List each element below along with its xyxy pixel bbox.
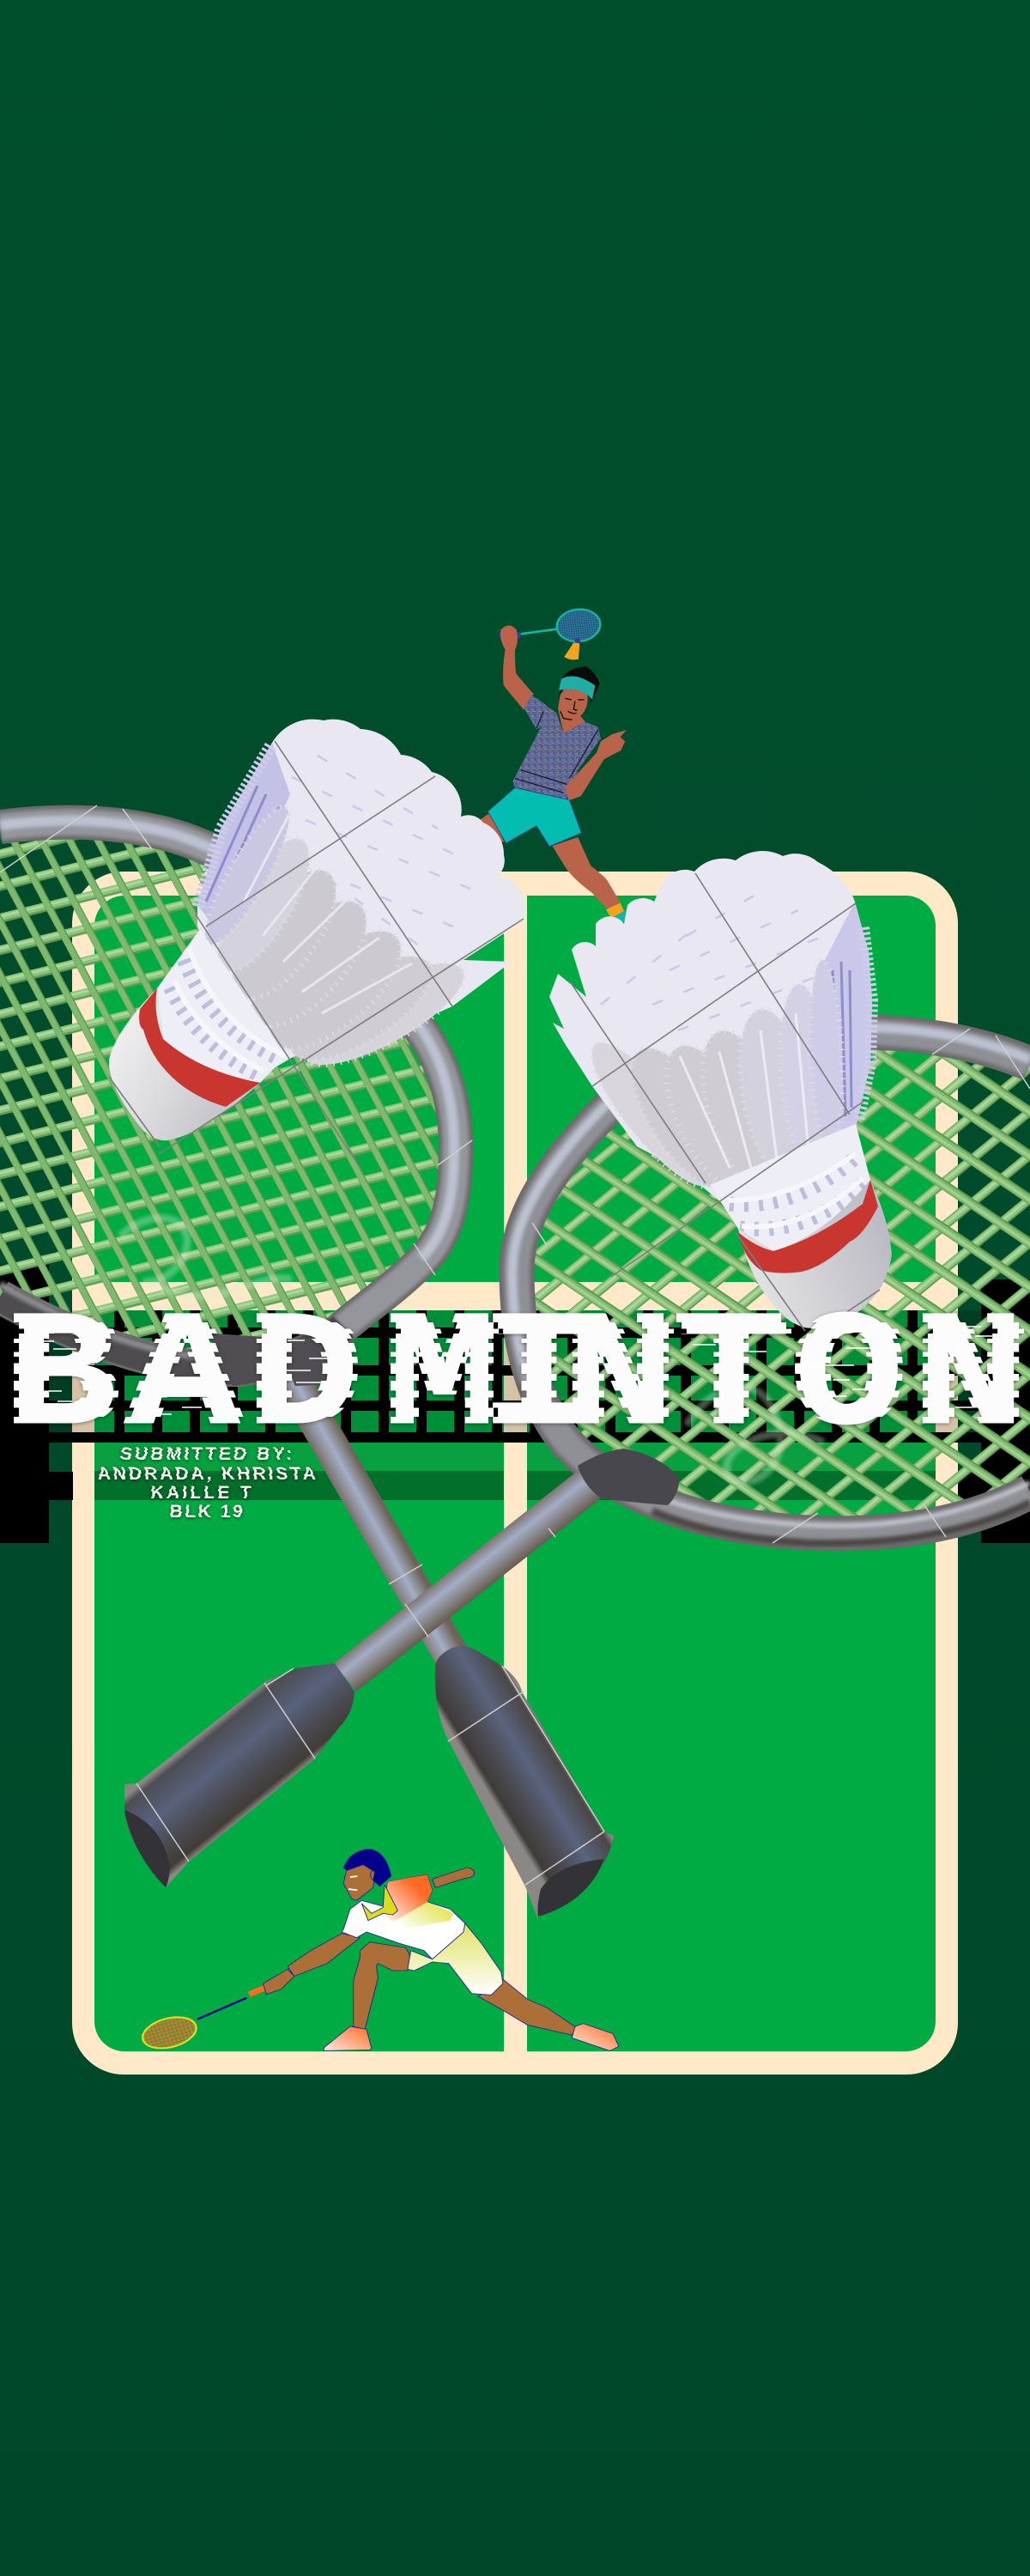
face details: [560, 698, 585, 720]
red band: [738, 1180, 878, 1273]
right racket: [124, 1022, 1030, 1887]
collar ribs: [157, 929, 286, 1083]
right racket strings: [534, 1049, 1030, 1516]
shirt: [512, 696, 601, 799]
face details: [348, 1876, 357, 1890]
pointing arm: [565, 730, 627, 800]
player racket: [500, 607, 602, 659]
right racket shaft: [334, 1454, 621, 1692]
collar ribs: [710, 1124, 870, 1251]
cork: [738, 1180, 892, 1328]
submitted by text: BLK 19: [169, 1502, 242, 1522]
racket seam lines: [0, 805, 1030, 1885]
neck and head: [558, 693, 585, 733]
back leg: [481, 813, 504, 854]
badminton court: [72, 872, 958, 2075]
right racket throat: [578, 1449, 680, 1505]
feather barb marks: [258, 756, 481, 953]
left racket shaft: [274, 1365, 470, 1670]
quills: [680, 1013, 809, 1168]
shorts: [488, 787, 581, 847]
submitted by text: [97, 1444, 315, 1522]
right racket grip: [124, 1663, 354, 1887]
front leg: [552, 837, 621, 909]
shoes: [324, 2026, 372, 2050]
collar: [361, 1885, 397, 1921]
player racket: [138, 1979, 286, 2054]
lower feathers: [575, 959, 846, 1206]
red band: [139, 988, 260, 1107]
submitted by text: SUBMITTED BY:: [120, 1444, 292, 1464]
lavender side: [820, 902, 872, 1142]
hair: [560, 666, 599, 702]
glitch band behind title: [0, 1265, 1030, 1543]
right racket frame: [512, 1028, 1030, 1543]
lavender side: [197, 743, 290, 940]
left racket: [0, 799, 614, 1917]
right racket ghost highlight: [687, 1387, 824, 1481]
quills: [244, 816, 412, 1013]
feather body: [197, 720, 524, 1074]
left racket frame: [0, 821, 456, 1370]
headband: [559, 677, 595, 700]
title glitch dashes: [41, 1327, 992, 1414]
lower feathers: [192, 799, 476, 1084]
title: BADMINTON: [8, 1286, 1030, 1471]
front leg: [354, 1942, 411, 2029]
bottom player lunging: [138, 1849, 619, 2054]
feather barb marks: [601, 884, 833, 1030]
right shuttlecock: [549, 851, 892, 1331]
left racket strings: [0, 840, 439, 1350]
submitted by text: KAILLE T: [150, 1483, 251, 1503]
raised arm: [500, 625, 534, 710]
shuttle seams: [109, 741, 524, 1169]
front arm: [263, 1934, 360, 1995]
back arm: [433, 1868, 475, 1887]
left racket throat: [214, 1335, 335, 1384]
back leg: [478, 1979, 577, 2035]
feather body: [549, 851, 872, 1204]
submitted by text: ANDRADA, KHRISTA: [97, 1464, 315, 1484]
hair: [343, 1849, 391, 1886]
shirt: [342, 1874, 465, 1959]
top player jumping: [481, 607, 627, 923]
shuttle seams: [570, 873, 880, 1331]
cork: [109, 988, 260, 1140]
left racket ghost highlight: [120, 1218, 292, 1297]
shorts: [408, 1923, 503, 1995]
left racket grip: [435, 1646, 614, 1917]
left shuttlecock: [109, 720, 524, 1169]
head: [343, 1863, 375, 1900]
